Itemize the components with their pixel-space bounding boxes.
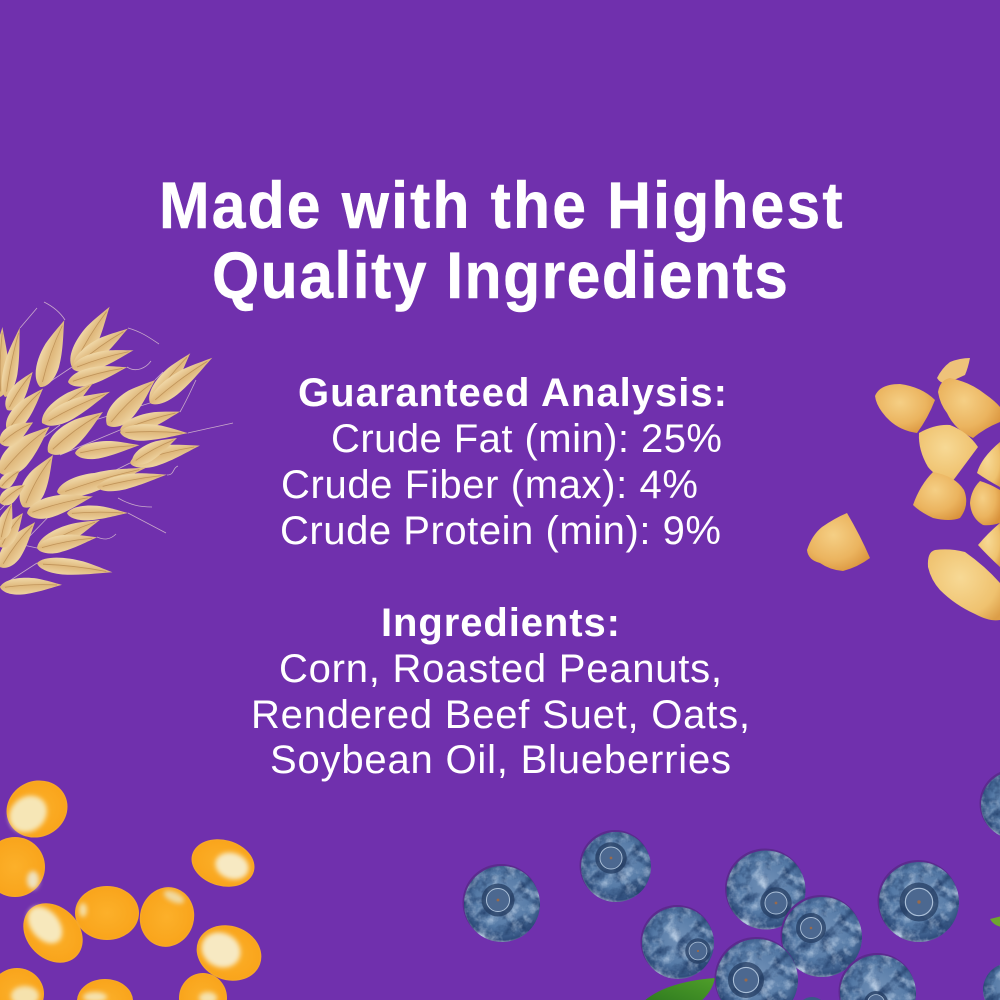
title: Quality Ingredients: [212, 240, 788, 313]
title: [159, 170, 843, 313]
icon: blueberries: [462, 769, 1000, 1000]
berry 3: [725, 848, 806, 930]
leaf bottom: [643, 978, 715, 1000]
berry 10: [983, 963, 1000, 1000]
kernel 10: [179, 973, 227, 1000]
guaranteed analysis text block: [280, 371, 727, 553]
ingredients list: Rendered Beef Suet, Oats,: [251, 693, 750, 737]
kernel 8: [0, 968, 44, 1000]
berry 1: [462, 864, 540, 942]
crude fat: Crude Fat (min): 25%: [331, 417, 722, 461]
peanut: top nub: [937, 358, 970, 383]
ingredients text block: [251, 601, 750, 782]
peanut: long half: [928, 549, 1000, 620]
kernel 3: [11, 891, 95, 975]
title: Made with the Highest: [159, 170, 843, 243]
guaranteed analysis heading: Guaranteed Analysis:: [298, 371, 727, 415]
kernel 2: [0, 837, 45, 897]
berry 8: [878, 860, 959, 942]
icon: corn kernels: [0, 771, 269, 1000]
berry 9: [980, 769, 1000, 839]
berry 5: [780, 895, 862, 977]
icon: peanuts: [807, 358, 1000, 620]
berry 4: [640, 905, 714, 979]
ingredients list: Corn, Roasted Peanuts,: [279, 647, 722, 691]
kernel 1: [0, 771, 77, 847]
peanut: right middle: [970, 481, 1000, 525]
kernel 4: [75, 886, 139, 940]
peanut: centre lower: [913, 472, 966, 520]
peanut: loose piece: [807, 513, 870, 571]
peanut: centre pale: [919, 425, 978, 482]
ingredients list: [251, 647, 750, 782]
kernel 7: [189, 916, 269, 990]
kernel 6: [186, 833, 260, 893]
peanut: top right: [938, 378, 1000, 438]
icon: oat sprig: [0, 301, 233, 595]
ingredients list: Soybean Oil, Blueberries: [270, 738, 731, 782]
berry 11: [797, 997, 827, 1000]
crude protein: Crude Protein (min): 9%: [280, 509, 721, 553]
berry 2: [580, 830, 651, 902]
peanut: top left: [875, 384, 935, 433]
berry 6: [714, 937, 798, 1000]
crude fiber: Crude Fiber (max): 4%: [281, 463, 698, 507]
ingredients heading: Ingredients:: [381, 601, 620, 645]
leaf right edge: [990, 916, 1000, 927]
kernel 5: [133, 881, 201, 953]
peanut: right upper: [977, 442, 1000, 487]
peanut: right lower: [978, 523, 1000, 567]
berry 7: [838, 953, 916, 1000]
kernel 9: [77, 979, 133, 1000]
